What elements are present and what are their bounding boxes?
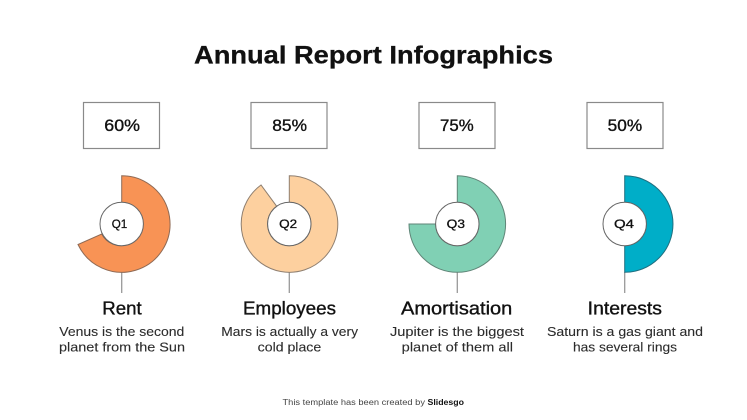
heading: Interests: Interests (588, 298, 662, 318)
description: Rent (59, 324, 185, 354)
donut chart Q3 (409, 176, 506, 272)
heading: Rent: Rent (102, 298, 142, 318)
donut chart Q2 (241, 176, 338, 272)
center label Q1 (100, 202, 143, 246)
donut chart Q1 (78, 176, 170, 272)
percentage box: 75% (419, 102, 495, 148)
percentage box: 60%: 60% (104, 117, 140, 135)
description: Employees: Mars is actually a very (221, 324, 358, 339)
description: Rent: planet from the Sun (59, 340, 185, 354)
donut chart Q4 (625, 176, 673, 272)
description: Rent: Venus is the second (59, 324, 184, 339)
description: Employees (221, 324, 358, 354)
panel: Q2 Employees (221, 102, 358, 354)
center label Q4 (603, 202, 646, 246)
center label Q3: Q3 (447, 217, 465, 231)
description: Interests: Saturn is a gas giant and (547, 324, 703, 339)
description: Amortisation: planet of them all (402, 340, 513, 354)
percentage box: 85%: 85% (272, 117, 307, 135)
percentage box: 60% (84, 102, 160, 148)
connector line Q2 (288, 272, 290, 293)
percentage box: 50%: 50% (608, 117, 643, 135)
connector line Q3 (456, 272, 458, 293)
footer credit (282, 398, 464, 407)
connector line Q1 (121, 272, 123, 293)
center label Q3 (436, 202, 479, 246)
percentage box: 85% (251, 102, 327, 148)
heading: Amortisation: Amortisation (401, 298, 512, 318)
panel: Q4 Interests (547, 102, 703, 354)
heading: Employees: Employees (243, 298, 336, 318)
center label Q2 (268, 202, 311, 246)
description: Amortisation (390, 324, 524, 354)
footer credit: Slidesgo (428, 398, 464, 407)
connector line Q4 (624, 272, 626, 293)
footer credit: This template has been created by (282, 398, 425, 407)
center label Q2: Q2 (279, 217, 298, 231)
description: Interests: has several rings (573, 340, 677, 354)
description: Employees: cold place (258, 340, 321, 354)
center label Q4: Q4 (614, 217, 634, 231)
center label Q1: Q1 (112, 217, 128, 231)
panel: Q1 Rent (59, 102, 185, 354)
description: Interests (547, 324, 703, 354)
panel: Q3 Amortisation (390, 102, 524, 354)
description: Amortisation: Jupiter is the biggest (390, 324, 524, 339)
title: Annual Report Infographics (194, 42, 553, 70)
percentage box: 75%: 75% (440, 117, 474, 135)
percentage box: 50% (587, 102, 663, 148)
